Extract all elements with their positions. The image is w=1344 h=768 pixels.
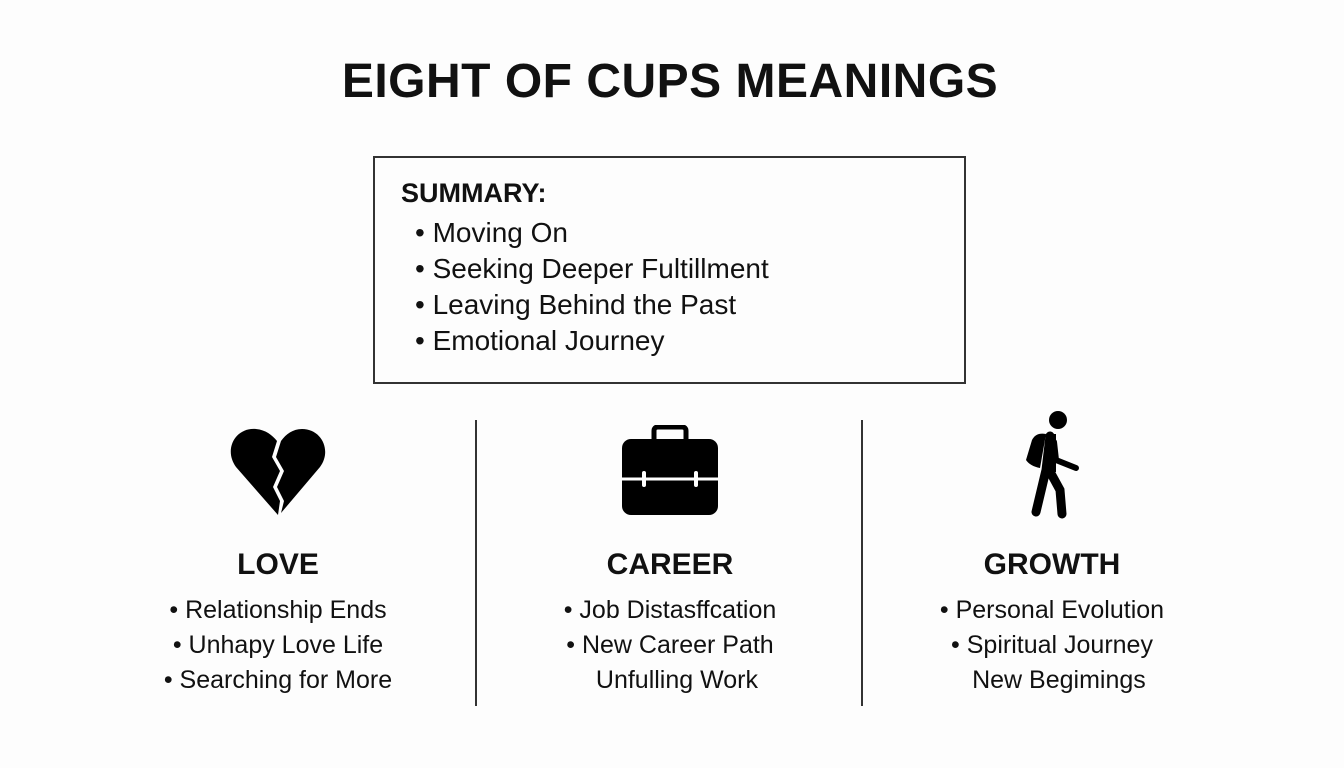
title: EIGHT OF CUPS MEANINGS (342, 55, 998, 108)
career list (564, 596, 776, 694)
career list: • New Career Path (566, 631, 774, 659)
heading: love: LOVE (237, 548, 319, 581)
summary list: • Moving On (415, 217, 568, 248)
growth list: • Personal Evolution (940, 596, 1164, 624)
heading: career: CAREER (607, 548, 733, 581)
love list: • Unhapy Love Life (173, 631, 383, 659)
growth list: • Spiritual Journey (951, 631, 1153, 659)
love list: • Relationship Ends (169, 596, 387, 624)
summary list: • Emotional Journey (415, 325, 664, 356)
summary list: • Seeking Deeper Fultillment (415, 253, 769, 284)
column: career (564, 425, 776, 694)
icon: broken heart (230, 428, 326, 515)
column: growth (940, 411, 1164, 694)
career list: • Job Distasffcation (564, 596, 776, 624)
icon: walking hiker (1026, 411, 1079, 518)
column: love (164, 428, 392, 694)
growth list (940, 596, 1164, 694)
growth list: New Begimings (972, 666, 1146, 694)
summary box (373, 156, 966, 384)
summary list (415, 217, 769, 356)
heading: growth: GROWTH (984, 548, 1120, 581)
summary list: • Leaving Behind the Past (415, 289, 736, 320)
icon: briefcase (622, 425, 718, 515)
summary heading: SUMMARY: (401, 178, 546, 208)
love list (164, 596, 392, 694)
career list: Unfulling Work (596, 666, 758, 694)
love list: • Searching for More (164, 666, 392, 694)
